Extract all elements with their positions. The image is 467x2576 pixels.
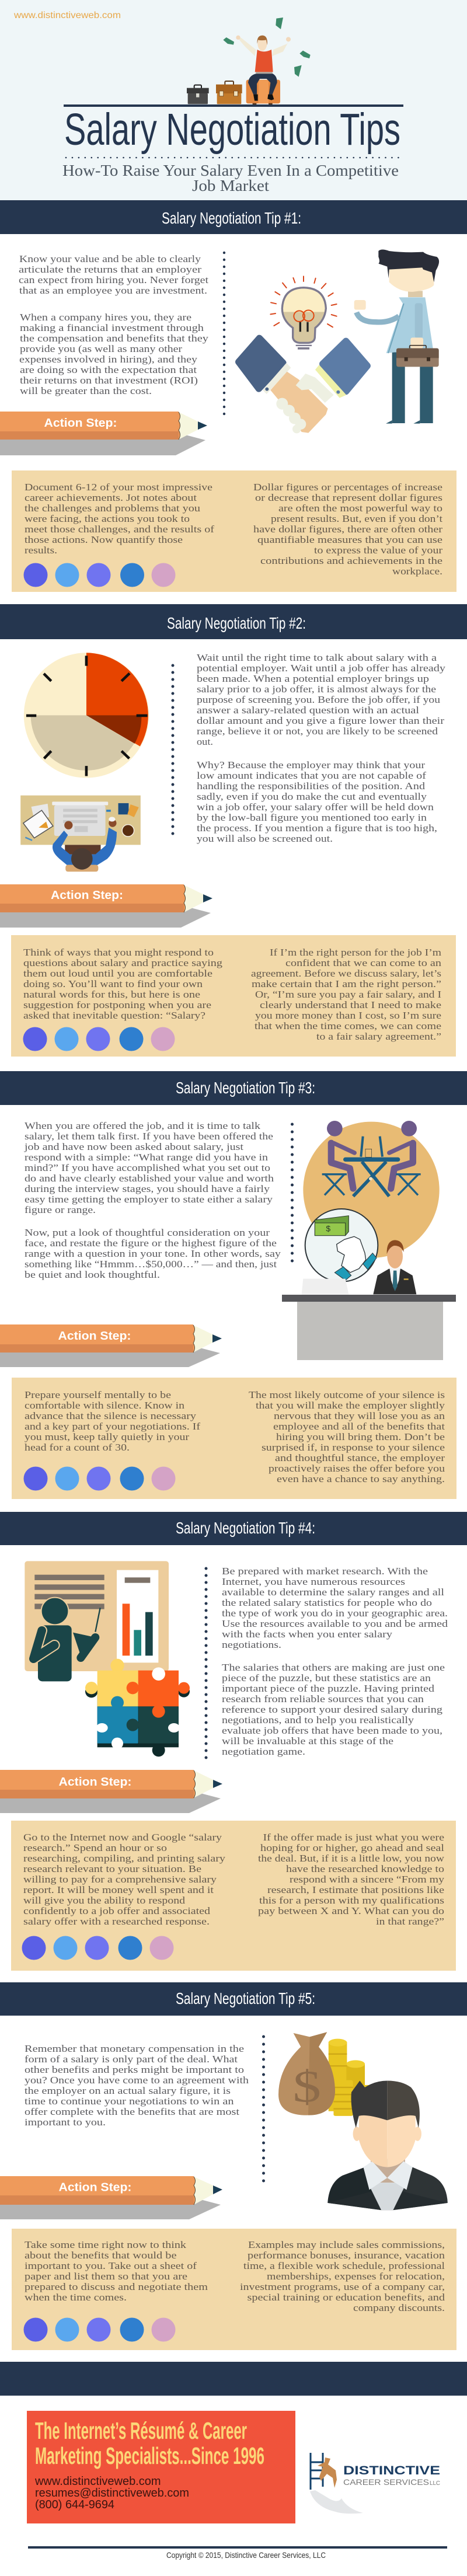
text: tip 4 body: Be prepared with market research. With the <box>222 1566 428 1577</box>
text: tip 4 body: Use the resources available to you and be armed <box>222 1618 448 1629</box>
action text right: make certain that I am the right person.” <box>252 978 441 989</box>
text: tip 2 body: by the low-ball figure you mentioned too early in <box>197 812 427 823</box>
action text right: nervous that they will lose you as an <box>274 1410 445 1421</box>
text: tip 5 body: time to continue your negotiations to win an <box>25 2096 234 2107</box>
action text right: investment programs, use of a company car, <box>240 2281 445 2292</box>
action text right: memberships, expenses for relocation, <box>267 2271 445 2282</box>
dotted rule under title <box>66 157 399 158</box>
icon: coins <box>329 2039 374 2116</box>
pencil: action step 5: Action Step: <box>58 2181 132 2194</box>
text: tip 3 body: face, and restate the figure or the highest figure of the <box>25 1238 277 1249</box>
action text left: will give you the ability to respond <box>23 1895 186 1906</box>
text: tip 1 body: can expect from hiring you. Never forget <box>19 274 208 285</box>
pencil: action step 1 <box>0 412 207 455</box>
action text left: research.” Spend an hour or so <box>23 1842 167 1853</box>
pencil: action step 5 <box>0 2176 222 2219</box>
action text right: to express the value of your <box>314 545 442 556</box>
action text right: even have a chance to say anything. <box>277 1473 445 1484</box>
text: tip 1 body <box>19 253 209 396</box>
text: tip 4 body: negotiation game. <box>222 1746 305 1757</box>
reception desk <box>282 1295 456 1360</box>
action text right: in that range?” <box>376 1916 444 1927</box>
pencil: action step 1: Action Step: <box>44 417 117 430</box>
icon: puzzle <box>85 1659 190 1756</box>
text: tip 3 body: easy time getting the employer to state either a salary <box>25 1194 273 1205</box>
hero illustration: man on briefcases with flying money <box>187 18 311 105</box>
action text right: The most likely outcome of your silence is <box>249 1389 445 1400</box>
action text right: respond with a sincere “From my <box>290 1874 445 1885</box>
action text right: pay between X and Y. What can you do <box>258 1905 444 1916</box>
action text left <box>23 1832 226 1927</box>
illustration: presenter at board with puzzle <box>25 1561 190 1756</box>
action text right: company discounts. <box>353 2302 445 2313</box>
logo: Distinctive Career Services: CAREER SERVICES <box>343 2477 429 2487</box>
text: tip 2 body: dollar amount and you give a figure lower than their <box>197 715 444 726</box>
action text left: natural words for this, but here is one <box>23 989 200 1000</box>
action text right: employee and all of the benefits that <box>273 1421 445 1432</box>
promo box <box>27 2411 295 2523</box>
text: tip 4 body: piece of the puzzle, but these statistics are an <box>222 1672 431 1683</box>
text: tip 5 body: Remember that monetary compensation in the <box>25 2043 244 2054</box>
dotted divider <box>223 253 225 421</box>
text: tip 4 body: the related salary statistics for people who do <box>222 1597 432 1608</box>
text: tip 2 body <box>197 652 446 844</box>
contact details: (800) 644-9694 <box>35 2498 114 2511</box>
logo: Distinctive Career Services: DISTINCTIVE <box>343 2464 440 2477</box>
action text left: important to you. Take out a sheet of <box>25 2260 197 2271</box>
text: tip 4 body: important piece of the puzzle. Having printed <box>222 1683 435 1694</box>
text: tip 3 body: job and have now been asked about salary, just <box>24 1141 243 1152</box>
banner: tip 1: Salary Negotiation Tip #1: <box>162 209 301 227</box>
text: tip 1 body: will be greater than the cost. <box>20 385 152 396</box>
text: tip 2 body: handling the responsibilities of the position. And <box>197 780 426 792</box>
icon: presentation board <box>25 1561 169 1671</box>
action text left: and a key part of your negotiations. If <box>25 1421 200 1432</box>
banner: tip 1 <box>0 200 467 234</box>
text: tip 4 body: research from reliable sources that you can <box>222 1693 424 1704</box>
illustration: meeting, cash handover and receptionist <box>302 1121 440 1294</box>
text: tip 2 body: purpose of screening you. Before the job offer, if you <box>197 694 441 705</box>
text: tip 4 body: Internet, you have numerous resources <box>222 1576 405 1587</box>
pencil: action step 4: Action Step: <box>58 1776 132 1789</box>
action text left: report. It will be money well spent and it <box>23 1884 214 1895</box>
dotted divider <box>172 665 174 834</box>
color dots <box>23 563 175 587</box>
action text left: doing so. You’ll want to find your own <box>23 978 203 989</box>
dotted divider <box>291 1124 294 1268</box>
action text left: the challenges and problems that you <box>25 503 201 514</box>
panel: action step 5 <box>12 2229 456 2350</box>
text: tip 2 body: out. <box>197 736 213 747</box>
action text left: were facing, the actions you took to <box>25 513 190 524</box>
text: tip 5 body: important to you. <box>25 2117 106 2128</box>
text: tip 2 body: the process. If you mention a figure that is too high, <box>197 822 437 834</box>
subtitle: Job Market <box>192 177 270 194</box>
icon: cash and hands: $ <box>326 1223 330 1233</box>
text: tip 3 body: Now, put a look of thoughtful consideration on your <box>25 1227 270 1238</box>
icon: presenter <box>33 1598 100 1681</box>
text: tip 4 body: negotiations, and to help you realistically <box>222 1714 414 1726</box>
text: tip 3 body: something like “Hmmm…$50,000…” — and then, just <box>25 1259 277 1270</box>
action text right: quantifiable measures that you can use <box>257 534 442 545</box>
banner: tip 4: Salary Negotiation Tip #4: <box>176 1519 315 1537</box>
action text left: Think of ways that you might respond to <box>23 947 214 958</box>
text: tip 5 body: you? Once you have come to an agreement with <box>25 2075 249 2086</box>
pencil: action step 3: Action Step: <box>58 1330 131 1343</box>
dotted divider <box>262 2037 265 2181</box>
icon: money bag: $ <box>293 2061 321 2111</box>
logo: Distinctive Career Services <box>310 2453 440 2514</box>
text: tip 1 body: provide you (as well as many other <box>20 343 182 354</box>
panel: action step 4 <box>11 1821 456 1971</box>
action text right: If I’m the right person for the job I’m <box>270 947 441 958</box>
banner: tip 3: Salary Negotiation Tip #3: <box>176 1079 315 1097</box>
footer banner <box>0 2362 467 2396</box>
pencil: action step 4 <box>0 1770 222 1813</box>
action text right: present results. But, even if you don’t <box>271 513 442 524</box>
action text left: questions about salary and practice saying <box>23 957 223 968</box>
action text left: about the benefits that would be <box>25 2250 176 2261</box>
action text right: you more money than I cost, so I’m sure <box>255 1010 441 1021</box>
pencil: action step 2: Action Step: <box>51 889 123 902</box>
pencil: action step 2 <box>0 884 212 928</box>
action text right <box>249 1389 445 1484</box>
action text left <box>23 947 223 1021</box>
action text left: results. <box>25 545 57 556</box>
action text right: this for a person with my qualifications <box>259 1895 444 1906</box>
text: tip 1 body: their returns on that investment (ROI) <box>20 375 198 386</box>
promo headline: The Internet’s Résumé & Career <box>35 2417 247 2444</box>
text: tip 2 body: sadly, even if you do make the cut and eventually <box>197 791 427 802</box>
promo headline: Marketing Specialists...Since 1996 <box>35 2442 264 2469</box>
action text right: surprised if, in response to your silence <box>262 1442 445 1453</box>
text: tip 3 body: figure or range. <box>25 1204 96 1215</box>
illustration: money bag and businessman <box>278 2032 448 2210</box>
action text right: and thoughtful stance, the employer <box>275 1452 445 1463</box>
text: tip 2 body: answer a salary-related question with an actual <box>197 705 419 716</box>
banner: tip 2 <box>0 604 467 639</box>
icon: businessman with briefcase <box>354 249 439 424</box>
text: tip 3 body <box>24 1120 281 1280</box>
action text right <box>240 2239 445 2313</box>
action text right: hoping for or higher, go ahead and seal <box>260 1842 444 1853</box>
text: tip 4 body: evaluate job offers that have been made to you, <box>222 1725 442 1736</box>
text: tip 2 body: Wait until the right time to talk about salary with a <box>197 652 437 663</box>
action text left <box>25 1389 200 1453</box>
action text right: Examples may include sales commissions, <box>248 2239 445 2250</box>
action text left: research relevant to your situation. Be <box>23 1863 201 1874</box>
illustration: light bulb, handshake and businessman <box>239 249 439 433</box>
text: tip 1 body: are doing so with the expectation that <box>20 364 197 375</box>
text: tip 4 body: The salaries that others are making are just one <box>222 1662 445 1673</box>
footer rule <box>28 2546 447 2549</box>
text: tip 3 body: be quiet and look thoughtful. <box>25 1269 160 1280</box>
action text right: that when the time comes, we can come <box>255 1020 441 1031</box>
action text left: advance that the silence is necessary <box>25 1410 197 1421</box>
logo: Distinctive Career Services: LLC <box>430 2480 440 2487</box>
text: tip 5 body: other benefits and perks might be important to <box>25 2064 244 2075</box>
action text right: time, a flexible work schedule, professional <box>243 2260 445 2271</box>
color dots <box>23 1466 175 1491</box>
action text right: that you will make the employer slightly <box>256 1400 445 1411</box>
icon: receptionist <box>302 1240 416 1294</box>
action text left: researching, compiling, and printing salary <box>23 1853 226 1864</box>
text: tip 1 body: that as an employee you are investment. <box>19 285 207 296</box>
action text right: the deal. But, if it is a little low, you now <box>258 1853 445 1864</box>
text: tip 2 body: been made. When a potential employer brings up <box>197 673 429 684</box>
panel: action step 2 <box>11 935 456 1057</box>
text: tip 4 body: negotiations. <box>222 1639 281 1650</box>
contact details: resumes@distinctiveweb.com <box>35 2487 189 2500</box>
copyright: Copyright © 2015, Distinctive Career Services, LLC <box>166 2550 326 2560</box>
action text right: are often the most powerful way to <box>278 503 442 514</box>
action text left: comfortable with silence. Know in <box>25 1400 185 1411</box>
action text right: special training or education benefits, and <box>248 2292 445 2303</box>
text: tip 2 body: win a job offer, your salary offer will be held down <box>197 801 434 813</box>
icon: businessman <box>327 2080 448 2210</box>
action text left: Take some time right now to think <box>25 2239 187 2250</box>
text: tip 1 body: expenses involved in hiring), and they <box>19 354 198 365</box>
text: tip 3 body: do and have clearly established your value and worth <box>25 1173 274 1184</box>
dotted divider <box>204 1568 208 1762</box>
action text left: prepared to discuss and negotiate them <box>25 2281 208 2292</box>
action text right: performance bonuses, insurance, vacation <box>248 2250 445 2261</box>
text: tip 4 body: will be invaluable at this stage of the <box>222 1735 393 1747</box>
action text left: suggestion for postponing when you are <box>23 999 211 1010</box>
text: tip 2 body: you will also be screened out. <box>197 833 333 844</box>
action text left: Prepare yourself mentally to be <box>25 1389 171 1400</box>
header background <box>0 0 467 200</box>
text: tip 4 body: reference to support your desired salary during <box>222 1704 443 1715</box>
header rule <box>64 104 403 107</box>
text: tip 4 body: available to determine the salary ranges and all <box>222 1587 444 1598</box>
text: tip 3 body: salary, let them talk first. If you have been offered the <box>25 1131 273 1142</box>
action text left: head for a count of 30. <box>25 1442 130 1453</box>
action text right: If the offer made is just what you were <box>263 1832 444 1843</box>
subtitle <box>62 162 399 194</box>
text: tip 2 body: potential employer. Wait until a job offer has already <box>197 663 446 674</box>
text: tip 2 body: Why? Because the employer may think that your <box>197 759 425 771</box>
subtitle: How-To Raise Your Salary Even In a Competitive <box>62 162 399 179</box>
action text right <box>258 1832 445 1927</box>
promo headline <box>35 2417 264 2469</box>
panel: action step 3 <box>12 1378 456 1499</box>
text: tip 1 body: When a company hires you, they are <box>20 312 191 323</box>
action text left <box>25 2239 208 2303</box>
banner: tip 5: Salary Negotiation Tip #5: <box>176 1989 315 2007</box>
action text right: Dollar figures or percentages of increase <box>253 482 442 493</box>
action text left: confidently to a job offer and associated <box>23 1905 211 1916</box>
website link: www.distinctiveweb.com <box>13 11 121 20</box>
text: tip 2 body: low amount indicates that you are not capable of <box>197 770 426 781</box>
action text right: workplace. <box>392 566 442 577</box>
action text left: them out loud until you are comfortable <box>23 968 212 979</box>
action text left: Document 6-12 of your most impressive <box>25 482 212 493</box>
action text right: Or, “I’m sure you pay a fair salary, and I <box>255 989 441 1000</box>
text: tip 2 body: range, believe it or not, you are likely to be screened <box>197 726 438 737</box>
contact details <box>34 2475 189 2511</box>
text: tip 1 body: the compensation and benefits that they <box>20 333 209 344</box>
action text right: clearly understand that I need to make <box>260 999 441 1010</box>
action text left <box>25 482 214 556</box>
color dots <box>23 2317 175 2342</box>
icon: cash and hands <box>305 1209 378 1282</box>
text: tip 3 body: range with a question in your tone. In other words, say <box>25 1248 281 1259</box>
action text right: research, I estimate that positions like <box>267 1884 444 1895</box>
illustration: person at desk <box>20 796 141 872</box>
text: tip 5 body: form of a salary is only part of the deal. What <box>25 2054 238 2065</box>
banner: tip 2: Salary Negotiation Tip #2: <box>167 614 306 632</box>
text: tip 1 body: making a financial investment through <box>20 322 204 333</box>
action text left: you must, keep tally quietly in your <box>25 1431 189 1442</box>
action text left: willing to pay for a comprehensive salary <box>23 1874 217 1885</box>
text: tip 3 body: during the interview stages, you should have a fairly <box>25 1183 270 1194</box>
action text left: career achievements. Jot notes about <box>25 492 197 503</box>
action text left: those actions. Now quantify those <box>25 534 183 545</box>
banner: tip 5 <box>0 1982 467 2016</box>
text: tip 3 body: respond with a simple: “What range did you have in <box>25 1152 269 1163</box>
action text left: meet those challenges, and the results of <box>25 524 214 535</box>
icon: clock chart <box>24 653 149 778</box>
action text right: contributions and achievements in the <box>260 555 442 566</box>
color dots <box>23 1027 175 1051</box>
action text right: agreement. Before we discuss salary, let’s <box>251 968 441 979</box>
text: tip 3 body: mind?” If you have accomplished what you set out to <box>25 1162 270 1173</box>
action text right: have the researched knowledge to <box>286 1863 444 1874</box>
action text left: salary offer with a researched response. <box>23 1916 210 1927</box>
action text right: or decrease that represent dollar figures <box>255 492 442 503</box>
panel: action step 1 <box>12 470 456 592</box>
text: tip 1 body: articulate the returns that an employer <box>19 264 201 275</box>
action text left: asked that inevitable question: “Salary? <box>23 1010 205 1021</box>
action text left: when the time comes. <box>25 2292 127 2303</box>
text: tip 5 body <box>25 2043 249 2128</box>
action text left: paper and list them so that you are <box>25 2271 187 2282</box>
action text right: have dollar figures, there are often other <box>253 524 442 535</box>
action text right: to a fair salary agreement.” <box>316 1031 441 1042</box>
action text right: confident that we can come to an <box>285 957 442 968</box>
action text right <box>251 947 442 1042</box>
icon: two people at table <box>322 1121 421 1196</box>
text: tip 5 body: the employer on an actual salary figure, it is <box>25 2085 231 2096</box>
text: tip 1 body: Know your value and be able to clearly <box>19 253 201 264</box>
color dots <box>22 1936 174 1960</box>
action text right: proactively raises the offer before you <box>269 1463 445 1474</box>
icon: money bag <box>278 2032 335 2115</box>
banner: tip 3 <box>0 1071 467 1105</box>
text: tip 3 body: When you are offered the job, and it is time to talk <box>25 1120 261 1131</box>
action text right: hiring you will bring them. Don’t be <box>276 1431 445 1442</box>
pencil: action step 3 <box>0 1324 222 1367</box>
action text left: Go to the Internet now and Google “salary <box>23 1832 222 1843</box>
contact details: www.distinctiveweb.com <box>34 2475 161 2488</box>
banner: tip 4 <box>0 1512 467 1545</box>
text: tip 2 body: salary prior to a job offer, it is almost always for the <box>197 684 436 695</box>
text: tip 5 body: offer complete with the benefits that are most <box>25 2106 239 2117</box>
text: tip 4 body: the type of work you do in your geographic area. <box>222 1608 448 1619</box>
action text right <box>253 482 442 577</box>
text: tip 4 body: with the facts when you enter salary <box>222 1629 393 1640</box>
icon: light bulb <box>270 276 337 350</box>
icon: handshake <box>239 338 367 433</box>
text: tip 4 body <box>222 1566 448 1757</box>
